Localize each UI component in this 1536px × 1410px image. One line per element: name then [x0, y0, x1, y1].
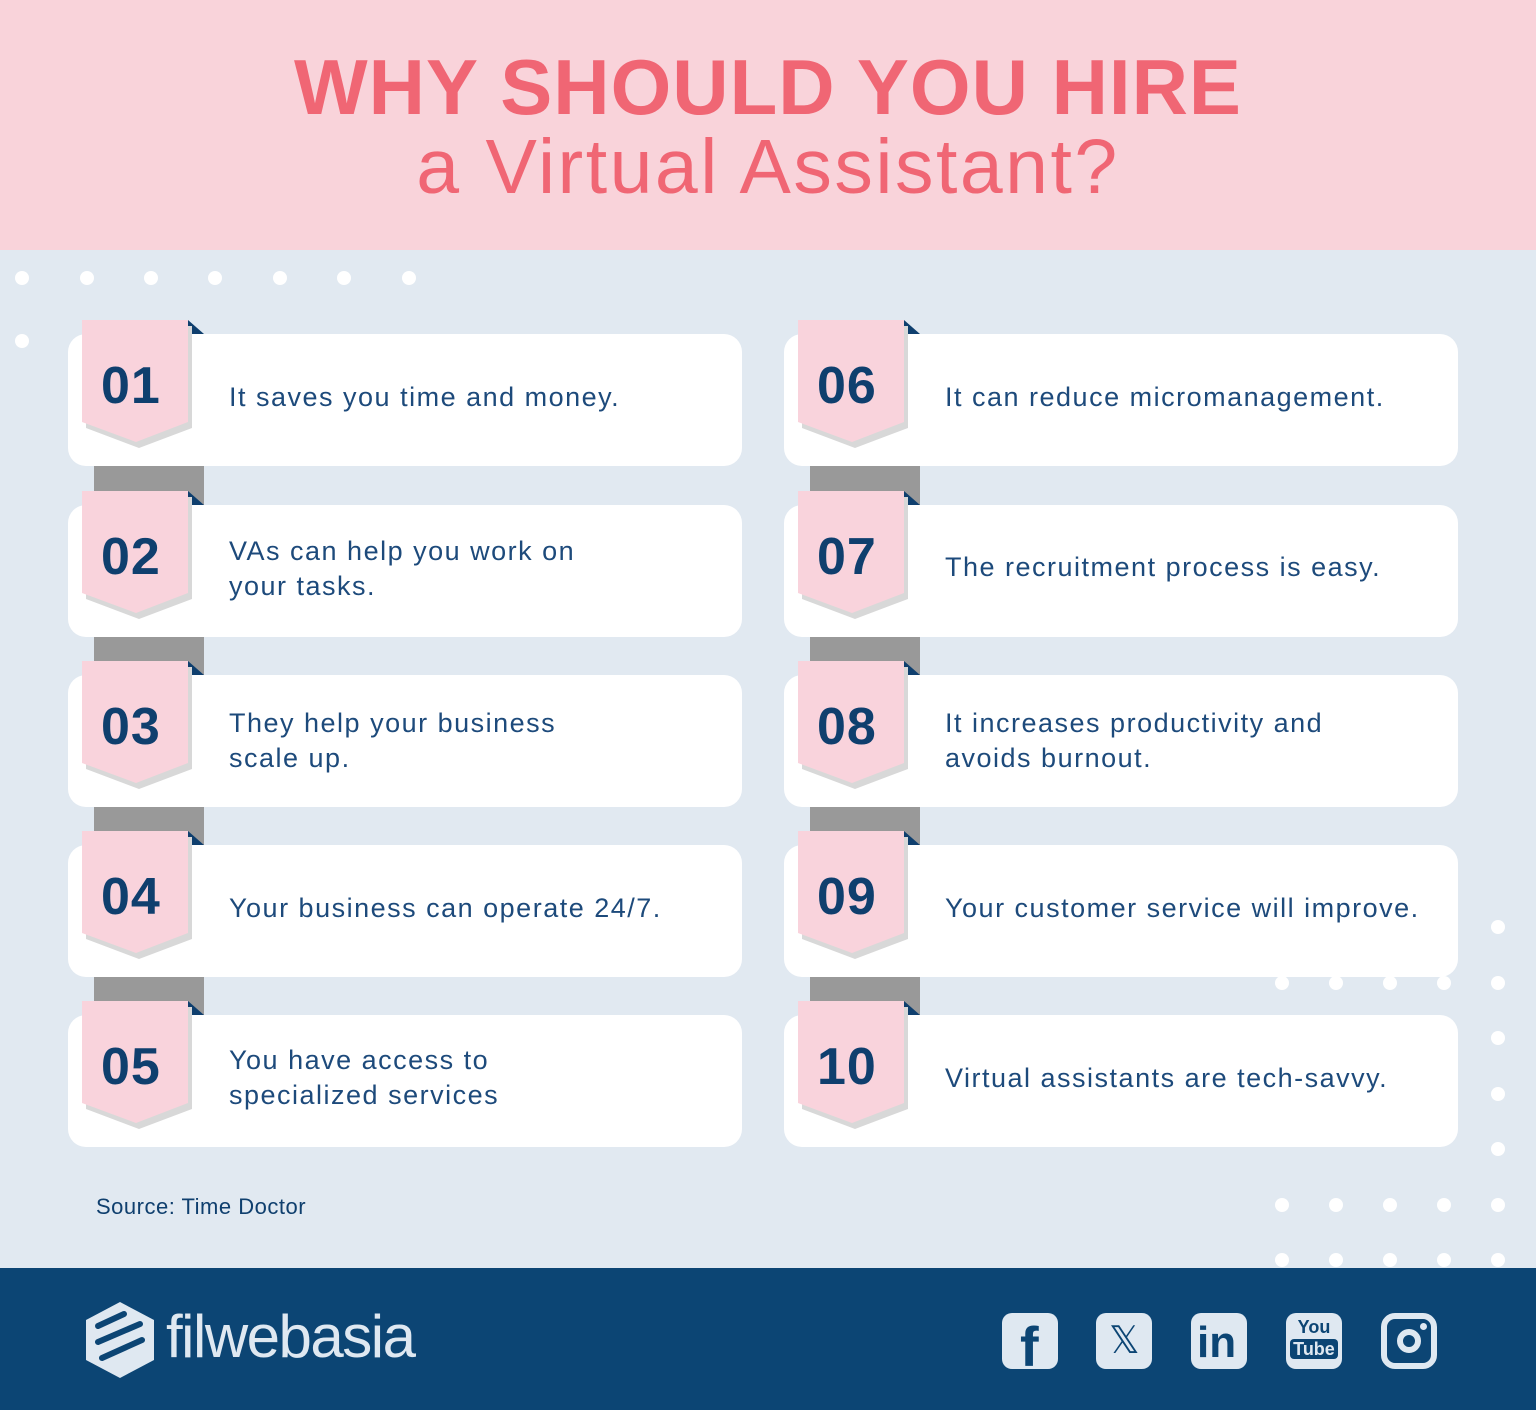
title: a Virtual Assistant? — [416, 124, 1120, 210]
item 08: It increases productivity and — [945, 708, 1323, 738]
icon: facebook: f — [1020, 1315, 1039, 1378]
item 01: 01 — [101, 357, 161, 415]
item 05: 05 — [101, 1038, 161, 1096]
footer — [0, 1268, 1536, 1410]
icon: youtube — [1286, 1313, 1342, 1369]
item 06: 06 — [817, 357, 877, 415]
item 08: 08 — [817, 698, 877, 756]
item 05 — [68, 1015, 742, 1147]
item 04 — [68, 845, 742, 977]
item 10: 10 — [817, 1038, 877, 1096]
item 09 — [784, 845, 1458, 977]
item 06: It can reduce micromanagement. — [945, 382, 1385, 412]
badge 01 — [82, 320, 204, 448]
icon: x — [1096, 1313, 1152, 1369]
item 03 — [68, 675, 742, 807]
item 07: 07 — [817, 528, 877, 586]
item 10 — [784, 1015, 1458, 1147]
item 08 — [784, 675, 1458, 807]
icon: linkedin — [1191, 1313, 1247, 1369]
icon: youtube: You — [1298, 1317, 1330, 1337]
item 07 — [784, 505, 1458, 637]
item 09: 09 — [817, 868, 877, 926]
item 02: 02 — [101, 528, 161, 586]
item 03: 03 — [101, 698, 161, 756]
item 05: You have access to — [229, 1045, 489, 1075]
item 09: Your customer service will improve. — [945, 893, 1420, 923]
icon: linkedin: in — [1197, 1318, 1236, 1367]
item 07: The recruitment process is easy. — [945, 552, 1381, 582]
logo: filwebasia — [166, 1303, 414, 1370]
icon: x: 𝕏 — [1109, 1320, 1140, 1362]
item 02 — [68, 505, 742, 637]
icon: facebook — [1002, 1313, 1058, 1369]
item 10: Virtual assistants are tech-savvy. — [945, 1063, 1388, 1093]
item 02: VAs can help you work on — [229, 536, 575, 566]
logo — [86, 1302, 416, 1378]
item 03: scale up. — [229, 743, 351, 773]
item 03: They help your business — [229, 708, 556, 738]
title: WHY SHOULD YOU HIRE — [294, 43, 1242, 131]
title — [294, 43, 1242, 210]
item 04: 04 — [101, 868, 161, 926]
source: Source: Time Doctor — [96, 1194, 306, 1219]
item 08: avoids burnout. — [945, 743, 1152, 773]
item 04: Your business can operate 24/7. — [229, 893, 662, 923]
item 06 — [784, 334, 1458, 466]
header band — [0, 0, 1536, 250]
icon: instagram — [1381, 1313, 1437, 1369]
item 02: your tasks. — [229, 571, 376, 601]
item 05: specialized services — [229, 1080, 499, 1110]
item 01 — [68, 334, 742, 466]
icon: youtube: Tube — [1293, 1339, 1335, 1359]
item 01: It saves you time and money. — [229, 382, 620, 412]
